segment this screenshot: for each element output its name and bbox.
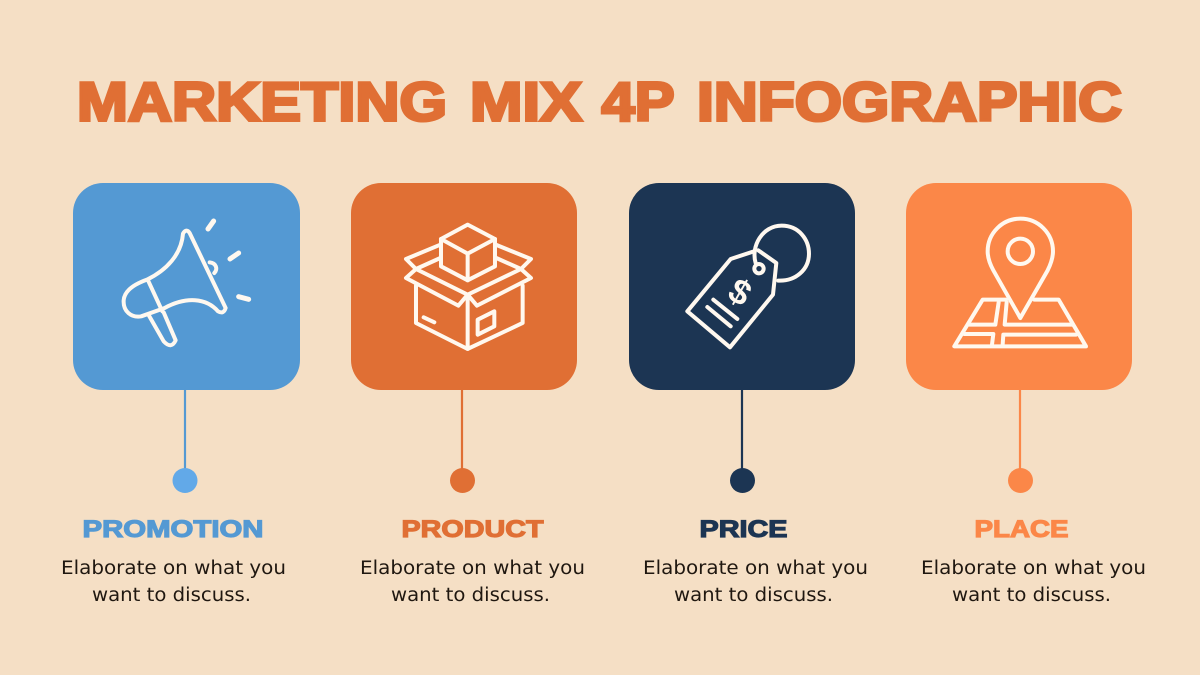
promotion connector <box>184 390 186 470</box>
price heading: PRICE <box>700 516 788 543</box>
promotion dot <box>172 468 198 493</box>
promotion card <box>73 183 300 390</box>
promotion description: want to discuss. <box>92 585 251 606</box>
place description: want to discuss. <box>952 585 1111 606</box>
panel: price <box>629 183 868 606</box>
title: MARKETING <box>77 70 447 132</box>
price card <box>629 183 855 390</box>
product heading: PRODUCT <box>402 516 544 543</box>
promotion description: Elaborate on what you <box>61 558 286 579</box>
price description <box>643 558 868 606</box>
place description: Elaborate on what you <box>921 558 1146 579</box>
product description <box>360 558 585 606</box>
promotion heading: PROMOTION <box>82 516 264 543</box>
place dot <box>1008 468 1033 493</box>
price connector <box>741 390 743 470</box>
product card <box>351 183 577 390</box>
panel: place <box>906 183 1146 606</box>
title <box>77 70 1122 132</box>
panel: promotion <box>61 183 300 606</box>
title: INFOGRAPHIC <box>697 70 1122 132</box>
product description: Elaborate on what you <box>360 558 585 579</box>
product dot <box>450 468 475 493</box>
icon: megaphone <box>124 221 249 345</box>
price dot <box>730 468 755 493</box>
title: 4P <box>602 70 674 132</box>
icon: map pin <box>954 219 1086 346</box>
place card <box>906 183 1132 390</box>
place description <box>921 558 1146 606</box>
place heading: PLACE <box>974 516 1068 543</box>
product connector <box>461 390 463 470</box>
place connector <box>1019 390 1021 470</box>
icon: dollar sign: $ <box>722 271 758 314</box>
icon: price tag <box>687 226 809 347</box>
icon: open box <box>406 225 531 349</box>
price description: Elaborate on what you <box>643 558 868 579</box>
promotion description <box>61 558 286 606</box>
title: MIX <box>470 70 582 132</box>
panel: product <box>351 183 585 606</box>
product description: want to discuss. <box>391 585 550 606</box>
price description: want to discuss. <box>674 585 833 606</box>
